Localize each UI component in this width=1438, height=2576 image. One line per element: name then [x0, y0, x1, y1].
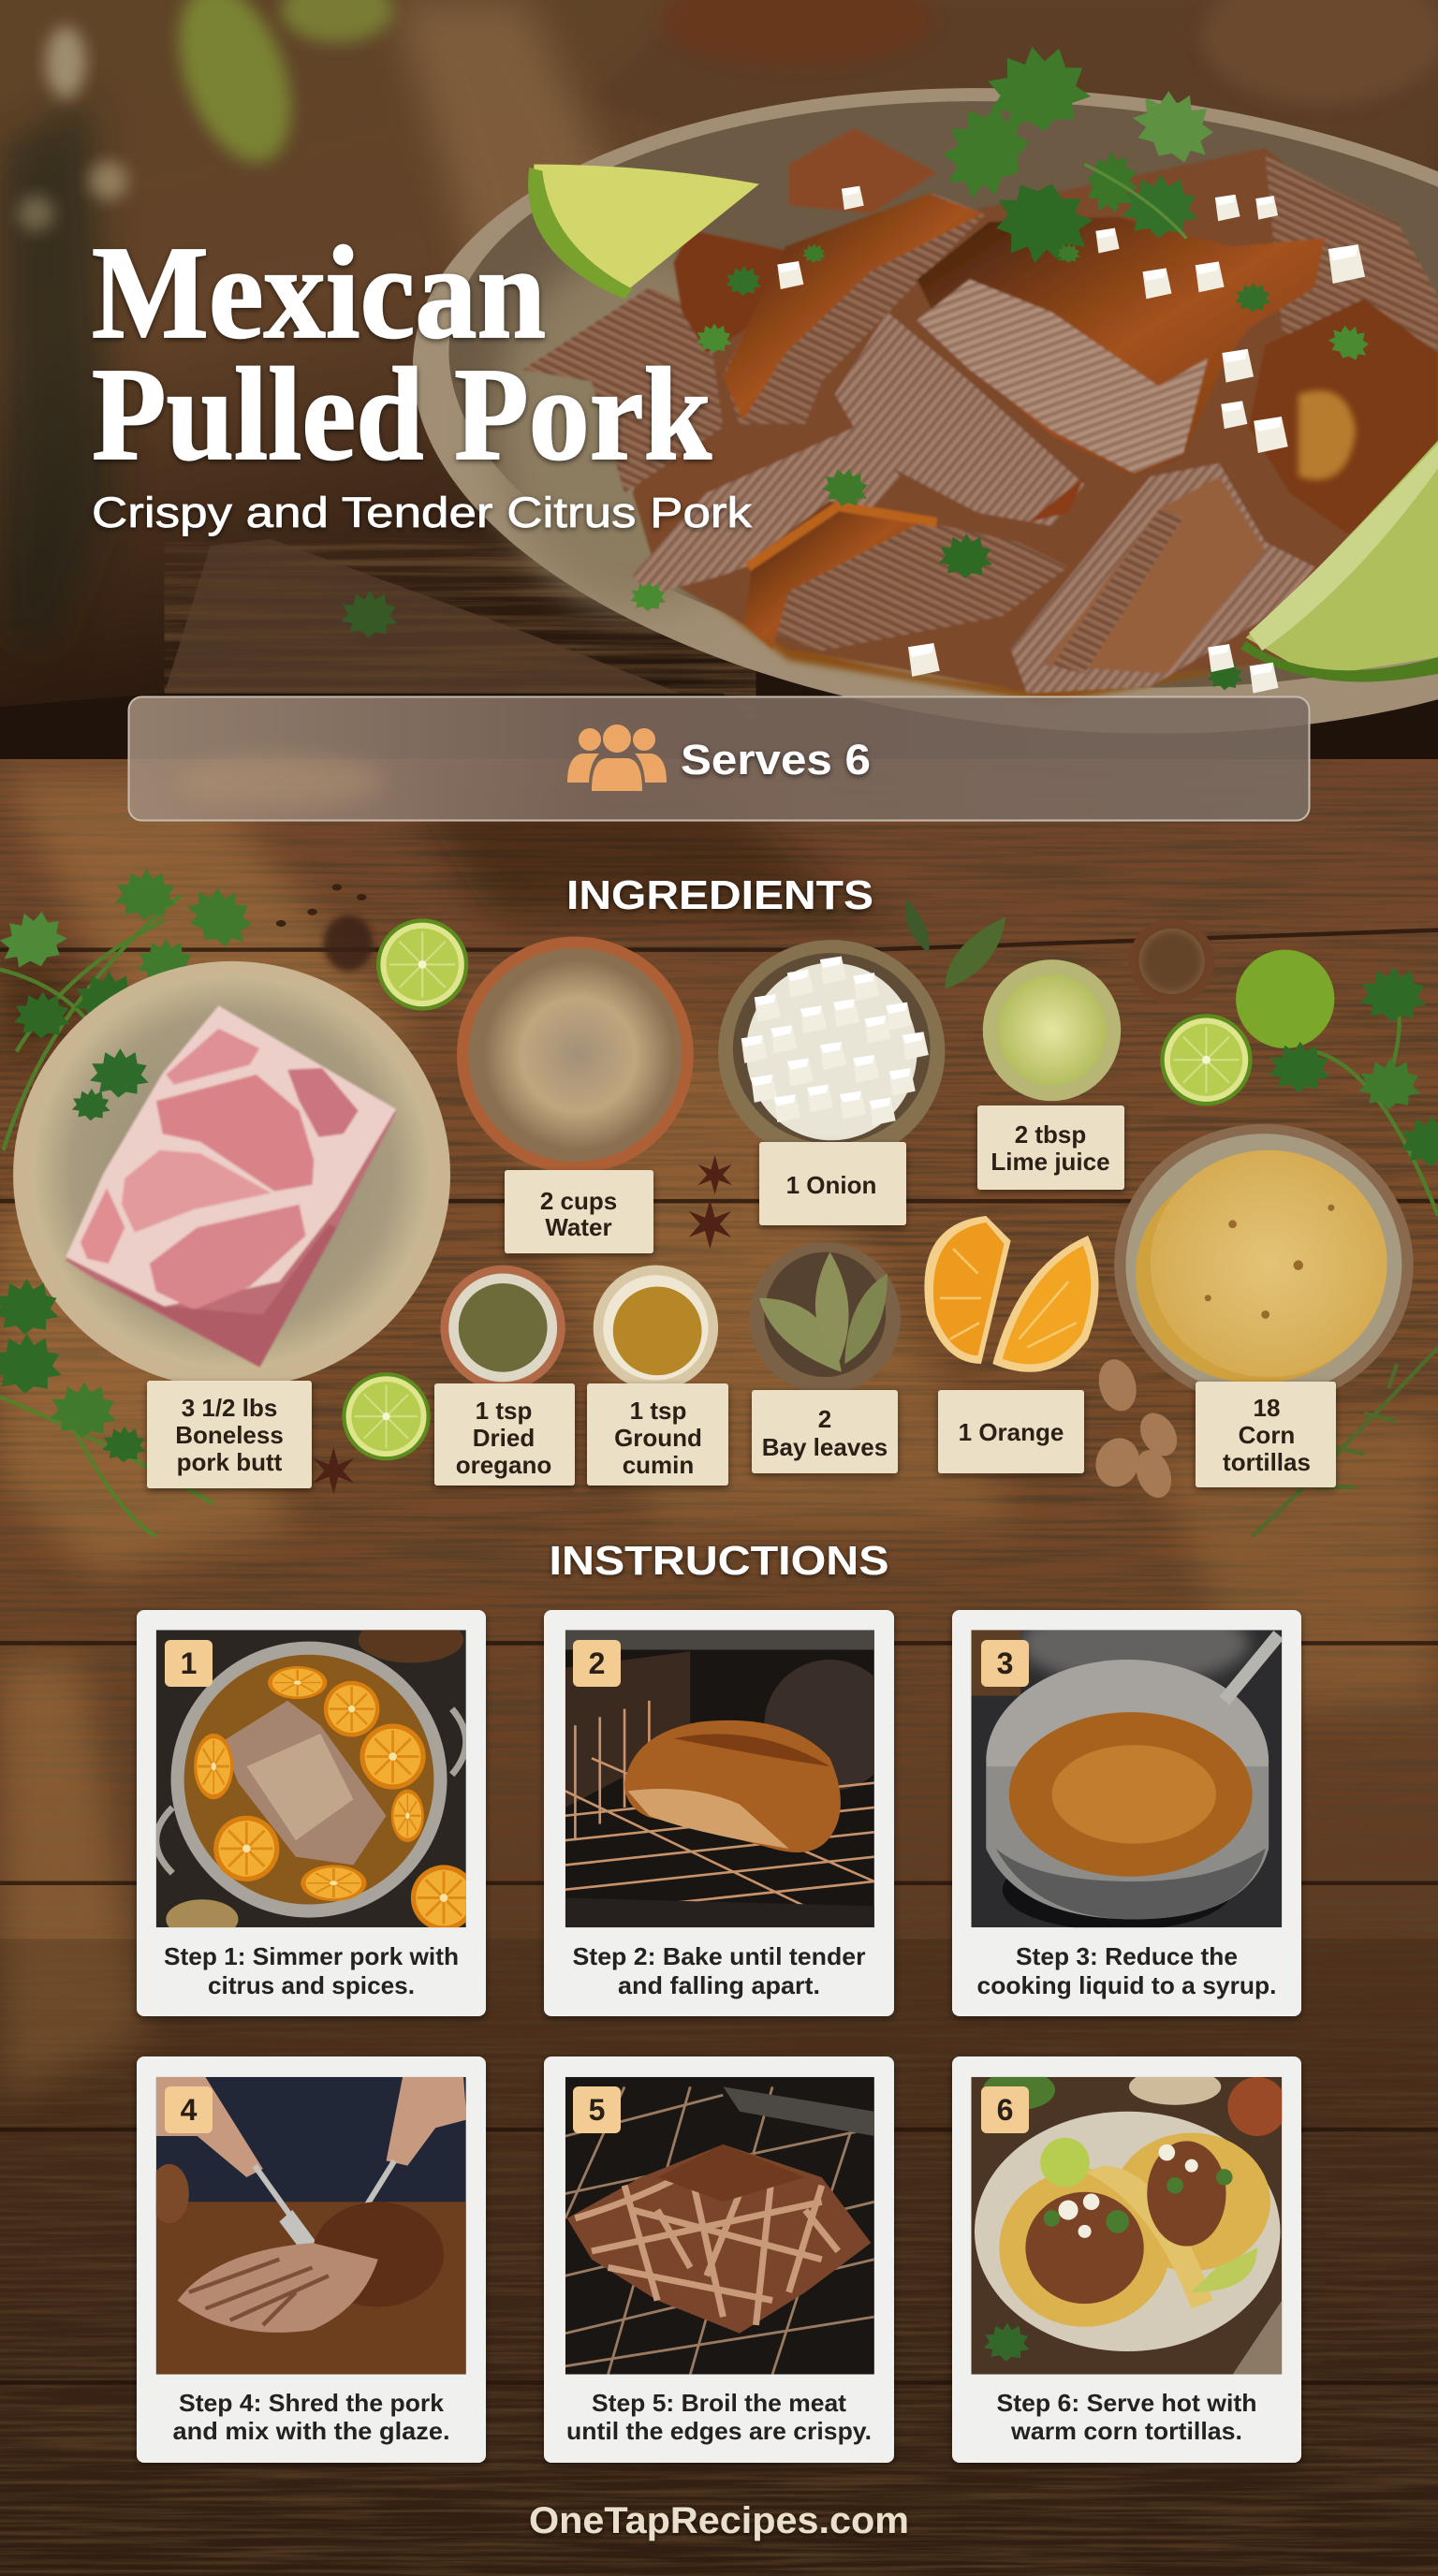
caption 5: until the edges are crispy.	[566, 2417, 872, 2445]
label text: cumin: Ground	[614, 1424, 702, 1452]
orange slices	[924, 1216, 1099, 1372]
badge 5: 5	[589, 2093, 605, 2127]
star anise	[314, 1155, 732, 1494]
badge 6	[981, 2086, 1029, 2133]
step captions	[164, 1942, 1277, 2445]
label text: lime juice: 2 tbsp	[1015, 1120, 1086, 1149]
label text: bay leaves: 2	[818, 1405, 831, 1433]
ingredient labels	[147, 1105, 1336, 1488]
badge 3: 3	[997, 1647, 1013, 1680]
photo 4: shredding with forks	[150, 2077, 467, 2375]
caption 6: warm corn tortillas.	[1010, 2417, 1242, 2445]
label text: pork: Boneless	[175, 1421, 284, 1449]
caption 1	[164, 1942, 459, 1999]
badge 3	[981, 1640, 1029, 1687]
photo 5: broiled meat	[565, 2077, 874, 2375]
label text: pork: 3 1/2 lbs	[182, 1394, 277, 1422]
raw pork	[66, 1005, 396, 1368]
instructions heading: INSTRUCTIONS	[549, 1538, 889, 1584]
label text: tortillas: Corn	[1239, 1421, 1295, 1449]
caption 5: Step 5: Broil the meat	[592, 2389, 846, 2417]
title: Mexican	[92, 218, 546, 366]
label text: cumin: cumin	[623, 1451, 694, 1479]
wood background	[0, 749, 1438, 2576]
spice dish	[1129, 918, 1214, 1004]
badge 6: 6	[997, 2093, 1013, 2127]
badge 4: 4	[181, 2093, 198, 2127]
caption 2	[573, 1942, 865, 1999]
label text: tortillas: 18	[1254, 1394, 1280, 1422]
caption 3	[977, 1942, 1277, 1999]
caption 3: Step 3: Reduce the	[1016, 1942, 1238, 1970]
cilantro on plate	[72, 1048, 149, 1120]
label text: water: Water	[545, 1213, 612, 1241]
label text: cumin: 1 tsp	[630, 1397, 686, 1425]
herbs: right	[1269, 967, 1438, 1216]
ingredient illustrations	[0, 869, 1438, 1536]
label text: pork: pork butt	[177, 1448, 283, 1476]
step cards	[137, 1610, 1301, 2463]
rosemary	[1253, 1347, 1438, 1536]
badge 2	[573, 1640, 621, 1687]
title: Pulled Pork	[92, 340, 712, 488]
limes	[342, 918, 1253, 1460]
hero photo: plated pulled pork	[0, 0, 1438, 785]
label text: oregano: Dried	[473, 1424, 535, 1452]
bay leaves loose	[905, 899, 1005, 989]
photo 1: simmering pot	[155, 1630, 466, 1928]
oregano bowl	[440, 1266, 565, 1390]
step number badges	[165, 1640, 1029, 2133]
label text: bay leaves: Bay leaves	[762, 1433, 888, 1461]
caption 3: cooking liquid to a syrup.	[977, 1971, 1277, 1999]
tortillas	[1114, 1124, 1414, 1407]
seeds	[276, 884, 373, 971]
subtitle: Crispy and Tender Citrus Pork	[92, 489, 753, 536]
water bowl	[457, 937, 694, 1173]
photo 3: reducing sauce	[971, 1603, 1282, 1931]
photo 2: oven bake	[565, 1630, 896, 1927]
badge 5	[573, 2086, 621, 2133]
label text: tortillas: tortillas	[1223, 1448, 1311, 1476]
title	[92, 218, 712, 488]
badge 1: 1	[181, 1647, 197, 1680]
bay leaves bowl	[749, 1242, 901, 1394]
caption 2: Step 2: Bake until tender	[573, 1942, 865, 1970]
whole lime	[1236, 950, 1334, 1048]
herbs: lower left	[0, 1279, 213, 1536]
cumin bowl	[594, 1266, 718, 1390]
caption 6	[996, 2389, 1256, 2445]
serves text: Serves 6	[681, 736, 871, 783]
garlic	[1089, 1355, 1184, 1502]
label text: lime juice: Lime juice	[990, 1148, 1110, 1176]
label text: orange: 1 Orange	[959, 1418, 1064, 1446]
label text: water: 2 cups	[540, 1187, 617, 1215]
caption 1: Step 1: Simmer pork with	[164, 1942, 459, 1970]
ingredients heading: INGREDIENTS	[566, 872, 873, 918]
label text: oregano: oregano	[456, 1451, 551, 1479]
caption 2: and falling apart.	[618, 1971, 820, 1999]
caption 5	[566, 2389, 872, 2445]
pulled pork meat pile	[522, 38, 1438, 694]
plate	[13, 961, 450, 1388]
footer website: OneTapRecipes.com	[529, 2500, 909, 2541]
badge 2: 2	[589, 1647, 605, 1680]
photo 6: tacos	[971, 2069, 1287, 2375]
serves bar	[129, 696, 1309, 820]
caption 4: Step 4: Shred the pork	[179, 2389, 445, 2417]
caption 1: citrus and spices.	[208, 1971, 415, 1999]
caption 4: and mix with the glaze.	[172, 2417, 449, 2445]
herbs: left cluster	[0, 869, 263, 1150]
lime juice glass	[983, 959, 1121, 1101]
label text: oregano: 1 tsp	[476, 1397, 532, 1425]
step photos	[150, 1603, 1287, 2375]
icon: people	[567, 724, 667, 791]
caption 4	[172, 2389, 449, 2445]
onion bowl	[718, 940, 945, 1164]
badge 1	[165, 1640, 213, 1687]
label text: onion: 1 Onion	[786, 1171, 876, 1199]
badge 4	[165, 2086, 213, 2133]
caption 6: Step 6: Serve hot with	[996, 2389, 1256, 2417]
